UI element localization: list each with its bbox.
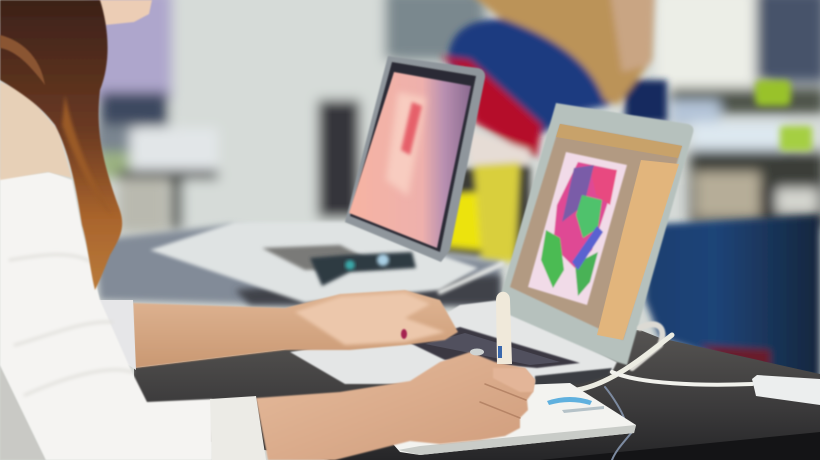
far forearm and hand <box>133 290 458 368</box>
other sleeve <box>98 300 136 370</box>
lid <box>500 103 693 365</box>
ring <box>470 348 484 356</box>
graphics tablet <box>393 383 636 455</box>
laptop base <box>150 222 478 303</box>
front laptop <box>290 103 693 386</box>
finger creases <box>480 384 526 418</box>
background person <box>440 0 820 380</box>
cuff <box>210 396 266 460</box>
stylus <box>496 292 512 364</box>
woman <box>0 0 535 460</box>
back laptop <box>150 56 485 303</box>
index finger over stylus <box>493 368 535 392</box>
artwork canvas <box>528 152 627 305</box>
usb adapter <box>752 375 820 405</box>
header bar <box>556 124 682 158</box>
side panel <box>597 160 679 340</box>
back table <box>95 225 500 305</box>
cables <box>440 264 752 460</box>
sweater sleeve <box>0 172 212 460</box>
screen <box>510 124 682 340</box>
shoulder <box>0 82 72 180</box>
keyboard base <box>290 300 617 384</box>
shadow below sweater <box>0 365 46 460</box>
laptop screen <box>349 72 471 248</box>
near forearm and hand <box>256 352 535 460</box>
painted nail <box>401 329 407 339</box>
sweater folds <box>10 255 132 395</box>
neck <box>98 0 152 25</box>
hair <box>0 0 122 290</box>
front table <box>134 330 820 460</box>
laptop lid <box>345 56 485 262</box>
